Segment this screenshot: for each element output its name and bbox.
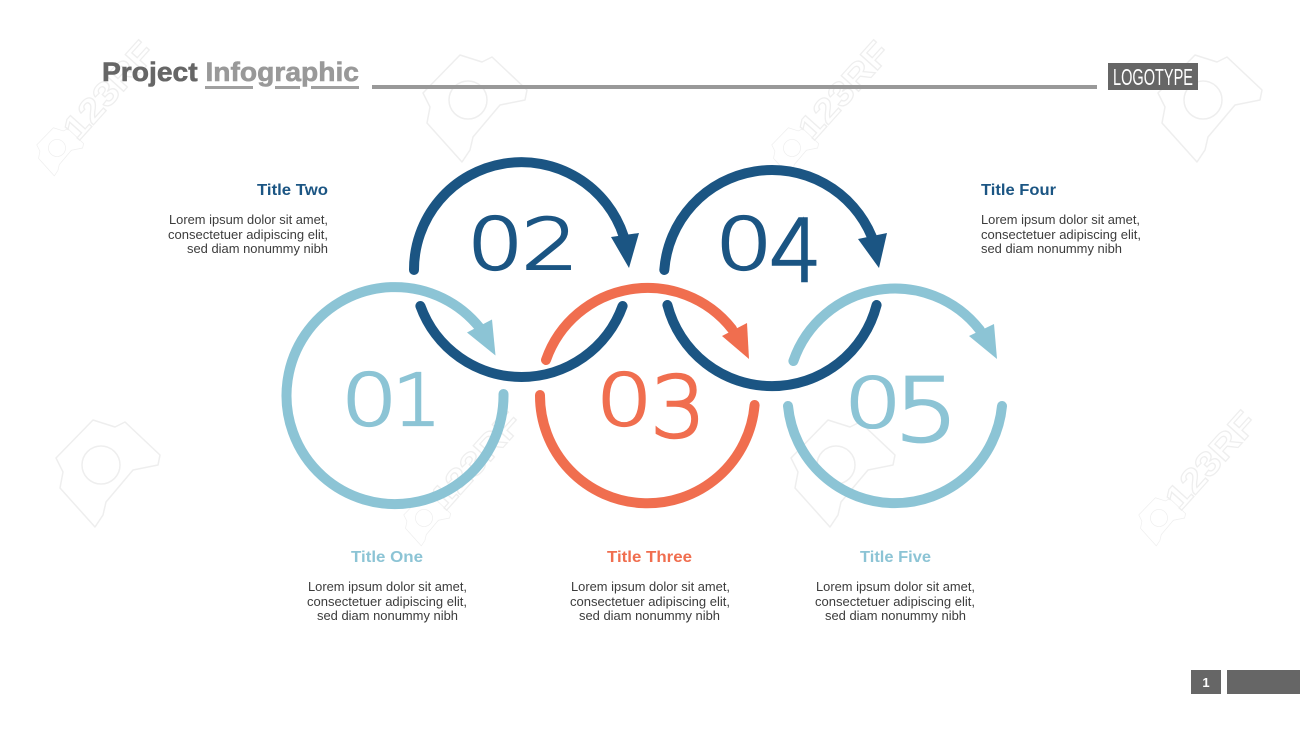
number 01: [341, 360, 441, 443]
text block: title one: [307, 549, 467, 623]
text block: title four: Lorem ipsum dolor sit amet,: [981, 212, 1140, 227]
text block: title five: sed diam nonummy nibh: [825, 608, 966, 623]
number 05: 0: [844, 364, 902, 444]
circle 03: [540, 288, 755, 503]
text block: title five: consectetuer adipiscing elit,: [815, 594, 975, 609]
text block: title one: consectetuer adipiscing elit,: [307, 594, 467, 609]
text block: title two: consectetuer adipiscing elit,: [168, 227, 328, 242]
text block: title two: sed diam nonummy nibh: [187, 241, 328, 256]
number 03: 3: [650, 359, 706, 458]
number 05: [844, 361, 959, 462]
number 04: 4: [769, 202, 822, 301]
number 02: 0: [467, 204, 524, 287]
text block: title four: [981, 182, 1141, 256]
number 03: [596, 359, 706, 458]
logotype: LOGOTYPE: [1113, 64, 1193, 90]
circle 01: [287, 287, 504, 504]
text block: title four: sed diam nonummy nibh: [981, 241, 1122, 256]
page number: 1: [1202, 675, 1210, 690]
number 03: 0: [596, 360, 653, 443]
text block: title one: Lorem ipsum dolor sit amet,: [308, 579, 467, 594]
watermarks: [37, 34, 1265, 546]
text block: title two: Title Two: [257, 182, 328, 199]
text block: title three: Title Three: [607, 549, 692, 566]
logotype: [1108, 63, 1198, 90]
circle 04: [664, 170, 887, 386]
text block: title four: consectetuer adipiscing elit,: [981, 227, 1141, 242]
text block: title five: Lorem ipsum dolor sit amet,: [816, 579, 975, 594]
title: Project Infographic: [102, 57, 359, 87]
text block: title five: [815, 549, 975, 623]
text block: title three: [570, 549, 730, 623]
number 02: [467, 204, 579, 287]
text block: title three: sed diam nonummy nibh: [579, 608, 720, 623]
circle 05: [788, 288, 1002, 503]
text block: title two: Lorem ipsum dolor sit amet,: [169, 212, 328, 227]
text block: title three: Lorem ipsum dolor sit amet,: [571, 579, 730, 594]
watermarks: 123RF: [791, 34, 898, 147]
number 05: 5: [894, 361, 959, 462]
text block: title two: [168, 182, 328, 256]
text block: title one: sed diam nonummy nibh: [317, 608, 458, 623]
number 01: 0: [341, 360, 398, 443]
number 04: [715, 202, 822, 301]
watermarks: 123RF: [1158, 404, 1265, 517]
text block: title four: Title Four: [981, 182, 1056, 199]
header: [102, 57, 1097, 89]
circle 02: [414, 162, 639, 377]
text block: title one: Title One: [351, 549, 423, 566]
number 04: 0: [715, 204, 773, 286]
watermarks: 123RF: [56, 34, 163, 147]
number 02: 2: [521, 205, 579, 286]
watermarks: 123RF: [423, 404, 530, 517]
text block: title five: Title Five: [860, 549, 931, 566]
page number: [1191, 670, 1300, 694]
text block: title three: consectetuer adipiscing elit,: [570, 594, 730, 609]
number 01: 1: [392, 360, 441, 442]
